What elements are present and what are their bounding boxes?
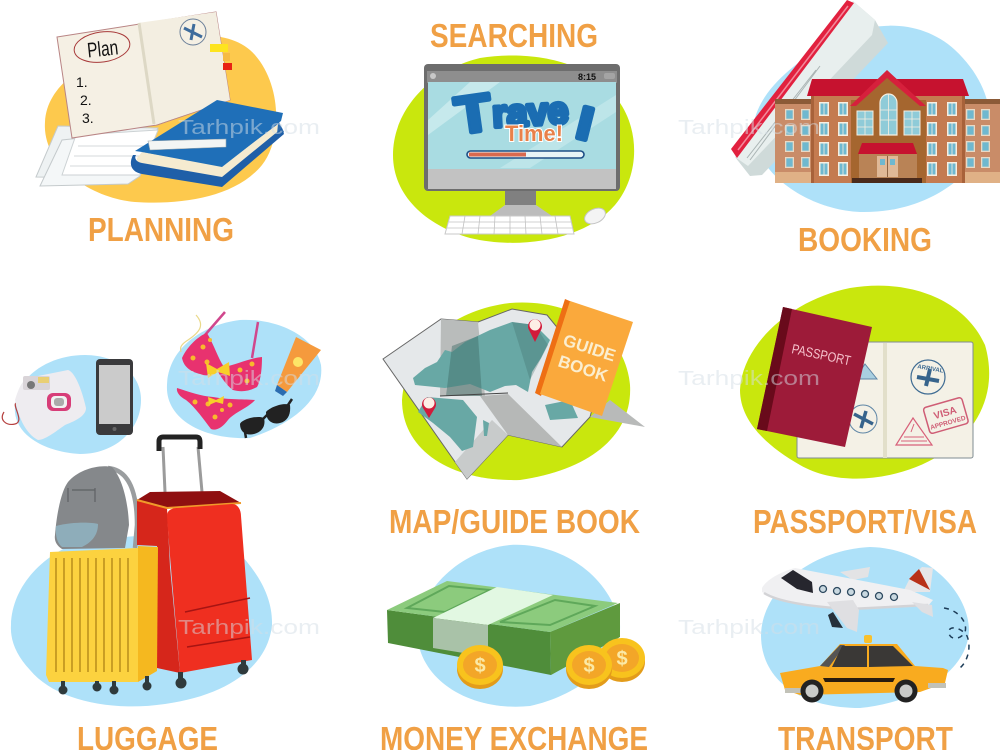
guide book — [535, 299, 633, 416]
guide book: BOOK — [556, 352, 611, 386]
green background blob — [402, 302, 630, 480]
sunscreen tube — [275, 337, 321, 396]
stamp: arrival — [911, 360, 945, 394]
camera — [2, 370, 86, 440]
loose paper sheets — [36, 126, 158, 186]
yellow suitcase — [46, 546, 158, 682]
panel: passport and visa — [740, 286, 989, 479]
title: booking: BOOKING — [798, 222, 932, 259]
panel: booking — [731, 0, 1000, 212]
hotel wings — [775, 99, 1000, 183]
watermarks: Tarhpik.com — [178, 117, 320, 139]
stamp: visa approved: VISA — [933, 405, 958, 422]
panel: swimwear and sun items — [167, 312, 321, 438]
gold coin: back right: $ — [616, 648, 628, 670]
desktop monitor: Time! — [505, 121, 563, 146]
panel: luggage — [11, 437, 272, 706]
gold coin: left: $ — [474, 655, 486, 677]
mouse — [582, 205, 608, 227]
watermarks: Tarhpik.com — [678, 117, 820, 139]
title: searching: SEARCHING — [430, 18, 598, 55]
banknote stack — [387, 581, 620, 675]
yellow background blob — [45, 36, 276, 203]
desktop monitor: 8:15 — [578, 72, 596, 82]
sunglasses — [240, 399, 292, 438]
passport cover — [757, 307, 872, 447]
open planner notebook: 1. — [76, 74, 88, 90]
taxi wheels — [800, 680, 918, 702]
bikini bottom — [177, 388, 255, 430]
travel time logo — [452, 83, 598, 150]
gold coin: front right — [566, 645, 612, 689]
taxi car — [780, 635, 948, 702]
travel time logo: T — [452, 83, 496, 146]
blue background blob — [417, 545, 620, 707]
open passport pages — [797, 342, 973, 458]
panel: map and guide book — [383, 299, 645, 480]
airplane — [762, 567, 933, 632]
stamp: arrival: ARRIVAL — [917, 364, 944, 375]
hotel building — [775, 70, 1000, 183]
watermarks: Tarhpik.com — [678, 617, 820, 639]
red suitcase handle — [159, 437, 202, 492]
monitor stand — [490, 191, 552, 216]
gold coin: front right: $ — [583, 655, 595, 677]
stamps on left page — [849, 364, 877, 433]
title: map / guide book: MAP/GUIDE BOOK — [389, 504, 640, 541]
desktop monitor — [424, 64, 620, 191]
passport cover: PASSPORT — [790, 341, 852, 368]
panel: camera and phone — [2, 355, 141, 454]
red suitcase wheels — [176, 660, 248, 688]
watermarks: Tarhpik.com — [178, 368, 320, 390]
hotel windows — [785, 94, 990, 176]
stamp: triangle — [896, 418, 932, 445]
watermarks — [178, 117, 820, 639]
open planner notebook: 2. — [80, 92, 92, 108]
gold coin: back right — [599, 638, 645, 682]
blue background blob — [753, 26, 990, 212]
green background blob — [393, 55, 634, 243]
blue background blob — [761, 547, 969, 708]
open planner notebook: Plan — [86, 36, 119, 62]
panel: searching — [393, 55, 634, 243]
green background blob — [740, 286, 989, 479]
open planner notebook — [57, 12, 232, 138]
hotel entrance — [852, 143, 922, 183]
panel: transport — [761, 547, 969, 708]
watermarks: Tarhpik.com — [678, 368, 820, 390]
travel time logo: rave — [491, 90, 569, 136]
travel time logo: l — [572, 99, 598, 150]
blue book with pen — [131, 100, 284, 187]
stamp: visa approved: APPROVED — [930, 415, 967, 432]
hotel main block — [811, 95, 965, 183]
blue background blob — [167, 320, 321, 438]
smartphone — [96, 359, 133, 435]
red suitcase — [137, 491, 252, 673]
panel: planning — [36, 12, 284, 203]
blue background blob — [11, 530, 272, 706]
gold coin: left — [457, 645, 503, 689]
red roof — [807, 70, 969, 106]
blue background blob — [15, 355, 141, 454]
guide book: GUIDE — [561, 331, 618, 365]
open planner notebook: 3. — [82, 110, 94, 126]
bikini top — [181, 312, 262, 391]
map pin: asia — [528, 319, 542, 342]
map continents — [413, 322, 578, 451]
yellow suitcase wheels — [58, 676, 152, 694]
folded world map — [383, 309, 645, 479]
panel: money exchange — [387, 545, 645, 707]
map pin: africa — [422, 397, 436, 418]
dashed flight path — [944, 608, 969, 668]
keyboard — [445, 216, 574, 234]
backpack — [55, 466, 137, 549]
plane tickets — [731, 0, 888, 176]
title: planning: PLANNING — [88, 212, 234, 249]
stamp: visa approved — [923, 397, 969, 434]
watermarks: Tarhpik.com — [178, 617, 320, 639]
